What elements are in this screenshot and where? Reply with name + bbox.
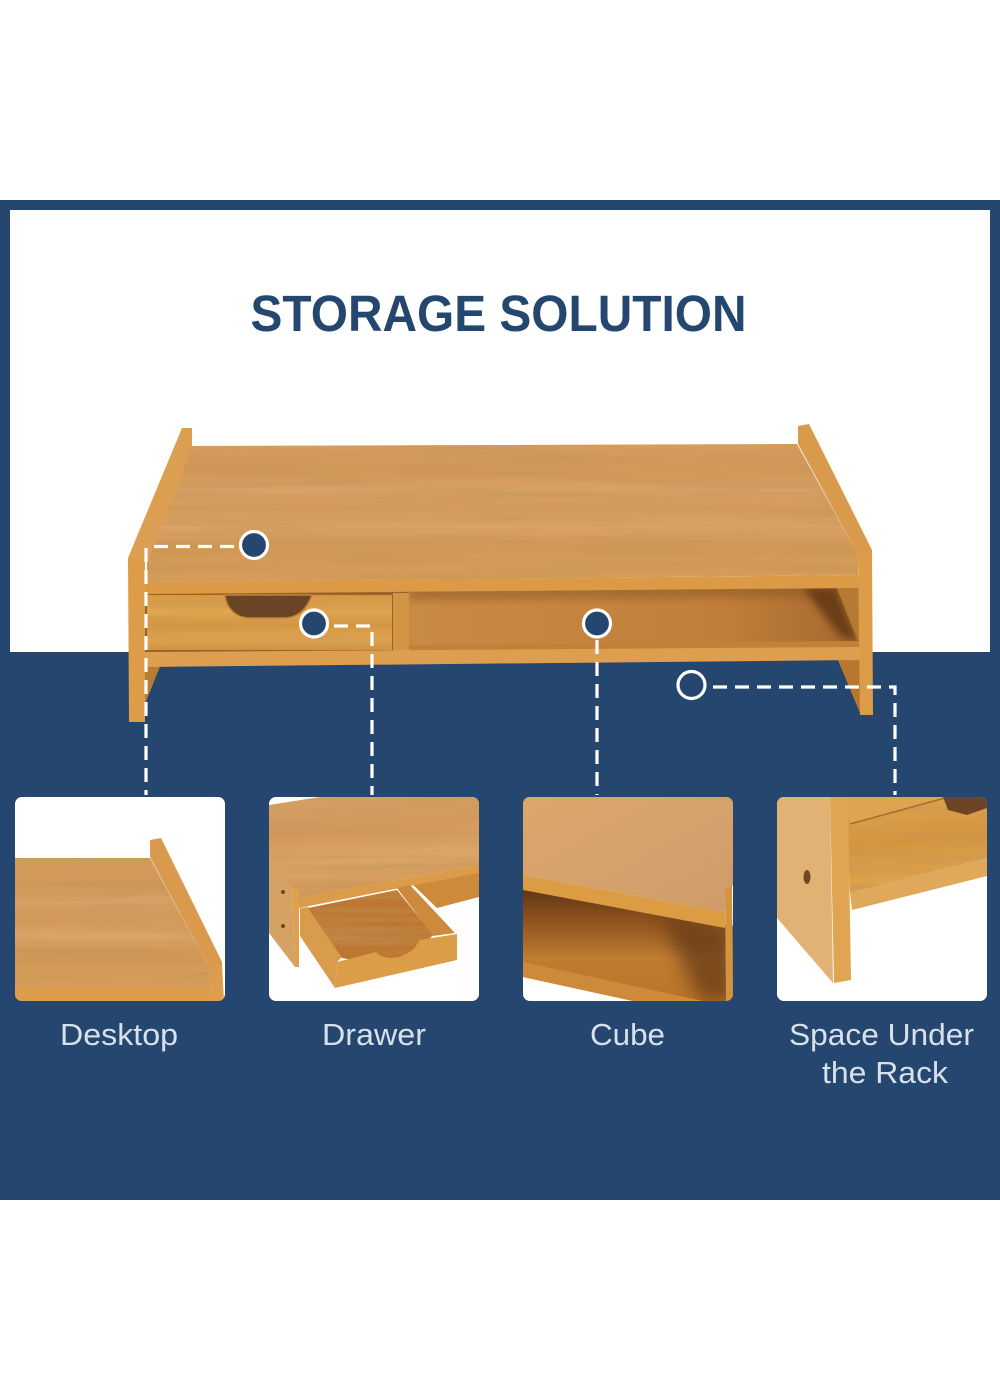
label: space under the rack: Space Under bbox=[789, 1017, 974, 1052]
marker: cube bbox=[584, 610, 610, 637]
rack top bbox=[269, 797, 479, 898]
top shelf front edge bbox=[145, 575, 859, 594]
thumbnail: drawer bbox=[269, 797, 479, 1001]
label: space under the rack bbox=[789, 1017, 974, 1090]
label: drawer: Drawer bbox=[322, 1017, 426, 1052]
drawer front bbox=[147, 595, 392, 650]
callout leader: drawer bbox=[334, 626, 372, 795]
label: cube: Cube bbox=[590, 1017, 665, 1052]
drawer handle cutout bbox=[225, 595, 312, 618]
cube divider bbox=[393, 593, 409, 651]
title: STORAGE SOLUTION bbox=[250, 285, 746, 342]
side post bbox=[269, 857, 295, 967]
thumbnail: cube bbox=[523, 797, 733, 1001]
top surface bbox=[147, 444, 858, 582]
bottom shelf strip bbox=[145, 647, 860, 667]
main product: bamboo monitor stand bbox=[128, 424, 873, 722]
open drawer bbox=[300, 907, 342, 988]
thumbnail: desktop bbox=[15, 797, 225, 1001]
callout leader: space under the rack bbox=[713, 687, 895, 795]
callout leader: desktop bbox=[146, 546, 236, 795]
right rear leg bbox=[837, 658, 860, 713]
label: desktop: Desktop bbox=[60, 1017, 178, 1052]
front opening backing bbox=[145, 584, 860, 654]
infographic: storage solution bbox=[0, 200, 1000, 1200]
callout leader: cube bbox=[595, 640, 599, 795]
marker: space under the rack bbox=[678, 672, 705, 698]
white upper panel bbox=[10, 210, 990, 652]
right upright bbox=[798, 424, 873, 715]
marker: desktop bbox=[240, 532, 268, 558]
thumbnail: space under the rack bbox=[777, 797, 987, 1001]
left upright bbox=[128, 428, 192, 722]
marker: drawer bbox=[300, 610, 328, 637]
navy background band bbox=[0, 200, 1000, 1200]
left rear leg bbox=[145, 664, 161, 704]
label: space under the rack: the Rack bbox=[822, 1055, 949, 1090]
cube behind drawer bbox=[413, 873, 479, 908]
cube opening bbox=[409, 584, 860, 652]
